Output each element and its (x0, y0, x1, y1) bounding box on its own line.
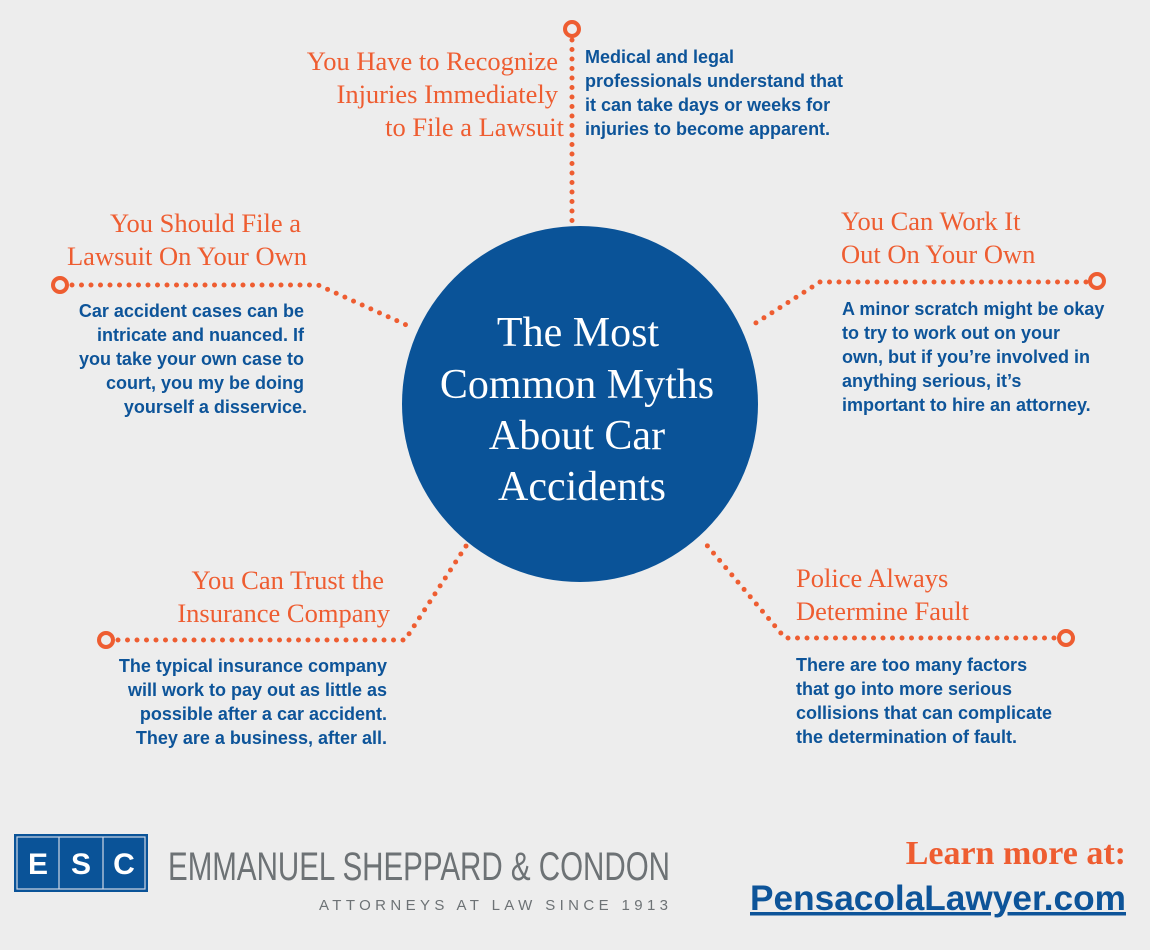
text: file on own: yourself a disservice. (124, 397, 307, 417)
heading: insurance: You Can Trust the (192, 565, 384, 595)
heading: file on own: You Should File a (110, 208, 301, 238)
text: recognize injuries: injuries to become apparent. (585, 119, 830, 139)
text: police: the determination of fault. (796, 727, 1017, 747)
central circle: Accidents (498, 464, 666, 510)
text: recognize injuries: professionals understand that (585, 71, 843, 91)
heading: file on own: Lawsuit On Your Own (67, 241, 307, 271)
central circle: Common Myths (440, 362, 714, 408)
text: police (796, 655, 1052, 747)
heading: police: Determine Fault (796, 596, 970, 626)
firm name (168, 845, 670, 914)
text: work it out: important to hire an attorney. (842, 395, 1091, 415)
heading: police (796, 563, 970, 626)
heading: insurance (177, 565, 391, 628)
heading: recognize injuries: to File a Lawsuit (385, 112, 565, 142)
logo: ESC: S (71, 848, 91, 881)
text: police: There are too many factors (796, 655, 1027, 675)
connector: lower right (705, 543, 1073, 645)
text: file on own: court, you my be doing (106, 373, 304, 393)
text: recognize injuries: it can take days or weeks for (585, 95, 830, 115)
logo: ESC (14, 834, 148, 892)
heading: recognize injuries (307, 46, 565, 142)
text: file on own: you take your own case to (79, 349, 304, 369)
text: work it out (842, 299, 1104, 415)
firm name: ATTORNEYS AT LAW SINCE 1913 (319, 897, 668, 914)
text: work it out: A minor scratch might be okay (842, 299, 1104, 319)
connector: upper left (53, 278, 413, 328)
call to action: Learn more at: (906, 835, 1126, 872)
text: police: collisions that can complicate (796, 703, 1052, 723)
connector: upper right (748, 274, 1104, 328)
connector: top (565, 22, 579, 226)
call to action (750, 835, 1126, 918)
heading: work it out (841, 206, 1035, 269)
logo: ESC: E (28, 848, 48, 881)
call to action: PensacolaLawyer.com (750, 879, 1126, 918)
text: work it out: own, but if you’re involved in (842, 347, 1090, 367)
text: insurance: will work to pay out as little as (127, 680, 387, 700)
text: insurance: possible after a car accident. (140, 704, 387, 724)
heading: recognize injuries: You Have to Recognize (307, 46, 558, 76)
text: police: that go into more serious (796, 679, 1012, 699)
text: recognize injuries (585, 47, 843, 139)
connector: lower left (99, 543, 468, 647)
heading: work it out: You Can Work It (841, 206, 1021, 236)
text: insurance (119, 656, 387, 748)
heading: police: Police Always (796, 563, 948, 593)
central circle (402, 226, 758, 582)
heading: work it out: Out On Your Own (841, 239, 1035, 269)
text: file on own: Car accident cases can be (79, 301, 304, 321)
text: file on own: intricate and nuanced. If (97, 325, 305, 345)
text: work it out: to try to work out on your (842, 323, 1060, 343)
central circle: About Car (489, 413, 665, 459)
firm name: EMMANUEL SHEPPARD & CONDON (168, 845, 670, 889)
text: insurance: The typical insurance company (119, 656, 387, 676)
heading: insurance: Insurance Company (177, 598, 391, 628)
text: recognize injuries: Medical and legal (585, 47, 734, 67)
text: work it out: anything serious, it’s (842, 371, 1021, 391)
heading: recognize injuries: Injuries Immediately (336, 79, 559, 109)
text: insurance: They are a business, after all. (136, 728, 387, 748)
logo: ESC: C (113, 848, 135, 881)
text: file on own (79, 301, 307, 417)
heading: file on own (67, 208, 307, 271)
central circle: The Most (497, 310, 659, 356)
